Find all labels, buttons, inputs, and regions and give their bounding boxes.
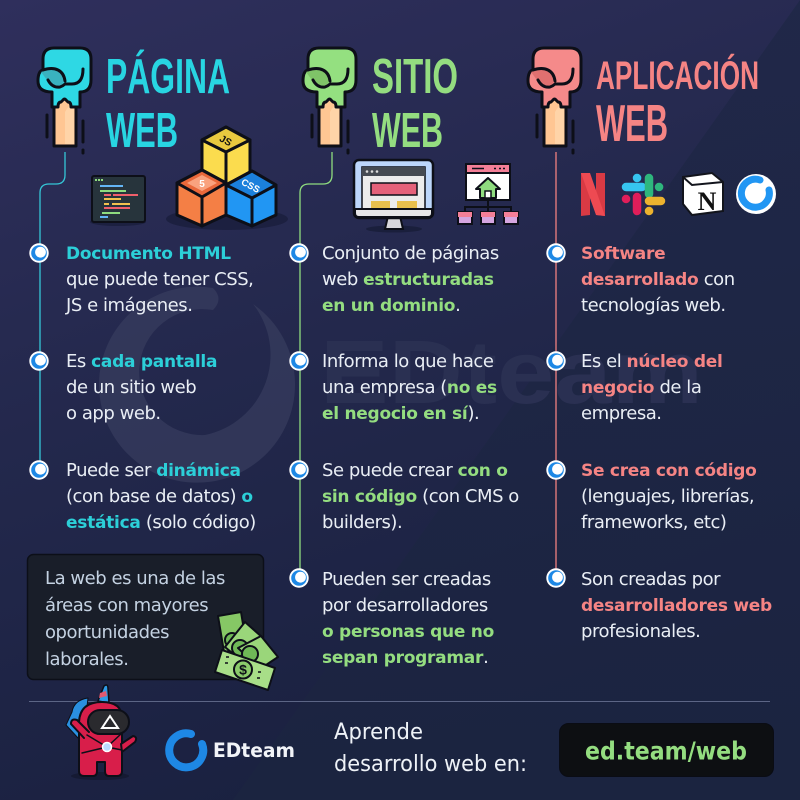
text: sitio web 1 xyxy=(322,243,499,316)
text: sitio web 2: el negocio en sí). xyxy=(322,403,479,424)
callout: oportunidades laborales xyxy=(28,554,264,680)
icon: code cubes xyxy=(166,127,288,230)
text: página web 2: de un sitio web xyxy=(66,377,196,398)
title: página web: PÁGINA xyxy=(106,50,230,104)
icon: fist rocket red xyxy=(528,48,581,153)
text: sitio web 1: en un dominio. xyxy=(322,295,460,316)
cube: CSS: CSS xyxy=(239,177,262,196)
bullets: sitio web xyxy=(289,243,309,588)
logo: EDteam: EDteam xyxy=(213,739,295,762)
title: aplicación web: WEB xyxy=(596,95,668,153)
text: aplicación web 4: desarrolladores web xyxy=(581,596,772,616)
icon: notion xyxy=(683,173,723,216)
text: aprende: Aprende xyxy=(334,720,423,745)
divider xyxy=(29,700,770,702)
text: aplicación web 2: empresa. xyxy=(581,403,662,424)
text: sitio web 3: builders). xyxy=(322,512,402,533)
text: aplicación web 3: frameworks, etc) xyxy=(581,512,726,533)
call to action: ed.team/web xyxy=(560,724,774,776)
text: aplicación web 1: tecnologías web. xyxy=(581,295,726,316)
text: sitio web 4: por desarrolladores xyxy=(322,595,488,616)
callout: oportunidades laborales: laborales. xyxy=(45,649,128,670)
title: página web xyxy=(106,50,230,158)
text: sitio web 2 xyxy=(322,351,497,424)
text: sitio web 1: Conjunto de páginas xyxy=(322,243,499,264)
text: página web 1: JS e imágenes. xyxy=(65,295,192,316)
call to action: ed.team/web: ed.team/web xyxy=(585,736,747,766)
icon: desktop monitor xyxy=(354,160,433,232)
icon: mascot xyxy=(66,685,136,780)
text: página web 3: estática (solo código) xyxy=(66,512,256,533)
text: aplicación web 1: desarrollado con xyxy=(581,269,735,290)
text: página web 1 xyxy=(65,244,253,316)
text: aplicación web 2: negocio de la xyxy=(581,377,701,398)
callout: oportunidades laborales: La web es una de las xyxy=(45,568,225,589)
cube: JS: JS xyxy=(217,134,234,149)
bullets: página web xyxy=(29,243,49,480)
icon: netflix xyxy=(581,173,605,216)
column connector: página web xyxy=(40,152,65,470)
text: aplicación web 2: Es el núcleo del xyxy=(581,351,723,372)
icon: slack xyxy=(626,178,661,211)
text: aprende: desarrollo web en: xyxy=(334,752,527,777)
text: página web 1: que puede tener CSS, xyxy=(66,269,253,290)
callout: oportunidades laborales: oportunidades xyxy=(45,622,169,643)
background diagonal panel xyxy=(233,0,800,800)
icon: money: $ xyxy=(239,662,247,678)
text: página web 3 xyxy=(66,460,256,533)
column connector: aplicación web xyxy=(555,152,557,578)
text: página web 2: o app web. xyxy=(66,403,161,424)
text: sitio web 3: Se puede crear con o xyxy=(322,460,508,481)
text: sitio web 4: o personas que no xyxy=(322,622,494,642)
text: sitio web 2: una empresa (no es xyxy=(322,377,497,398)
text: aplicación web 4: profesionales. xyxy=(581,621,700,642)
text: página web 2 xyxy=(66,351,217,424)
text: sitio web 1: web estructuradas xyxy=(322,269,494,290)
text: aplicación web 1 xyxy=(581,244,735,316)
title: sitio web: WEB xyxy=(372,104,443,158)
title: sitio web: SITIO xyxy=(372,50,458,104)
text: aplicación web 3: Se crea con código xyxy=(581,461,757,481)
text: sitio web 4: sepan programar. xyxy=(322,647,488,668)
icon: fist rocket green xyxy=(303,48,356,153)
text: sitio web 2: Informa lo que hace xyxy=(322,351,494,372)
text: aplicación web 2 xyxy=(581,351,723,424)
icon: money xyxy=(215,612,278,690)
title: sitio web xyxy=(372,50,458,158)
icon: site map xyxy=(458,164,518,224)
text: sitio web 3 xyxy=(322,460,519,533)
icon: EDteam circle logo xyxy=(736,174,776,214)
text: página web 3: (con base de datos) o xyxy=(66,486,253,507)
text: aplicación web 4 xyxy=(581,569,772,642)
text: sitio web 4 xyxy=(322,569,494,668)
bullets: aplicación web xyxy=(546,243,566,588)
text: página web 2: Es cada pantalla xyxy=(66,351,217,372)
watermark: EDteam logo xyxy=(99,287,703,483)
logo: EDteam xyxy=(169,733,295,767)
icon: notion: N xyxy=(698,187,717,216)
text: página web 1: Documento HTML xyxy=(66,244,231,264)
icon: code editor xyxy=(90,176,146,226)
cube: HTML: 5 xyxy=(199,179,205,190)
text: aplicación web 3: (lenguajes, librerías, xyxy=(581,486,754,507)
column connector: sitio web xyxy=(300,152,332,578)
text: página web 3: Puede ser dinámica xyxy=(66,460,241,481)
text: aplicación web 3 xyxy=(581,461,757,533)
text: sitio web 3: sin código (con CMS o xyxy=(322,486,519,507)
title: página web: WEB xyxy=(106,104,178,158)
text: aplicación web 1: Software xyxy=(581,244,665,264)
watermark: EDteam logo: EDteam xyxy=(320,323,703,423)
callout: oportunidades laborales: áreas con mayores xyxy=(45,595,208,616)
title: aplicación web xyxy=(596,52,759,153)
text: aplicación web 4: Son creadas por xyxy=(581,569,721,590)
icon: fist rocket cyan xyxy=(38,48,91,153)
text: aprende xyxy=(334,720,527,777)
text: sitio web 4: Pueden ser creadas xyxy=(322,569,491,590)
